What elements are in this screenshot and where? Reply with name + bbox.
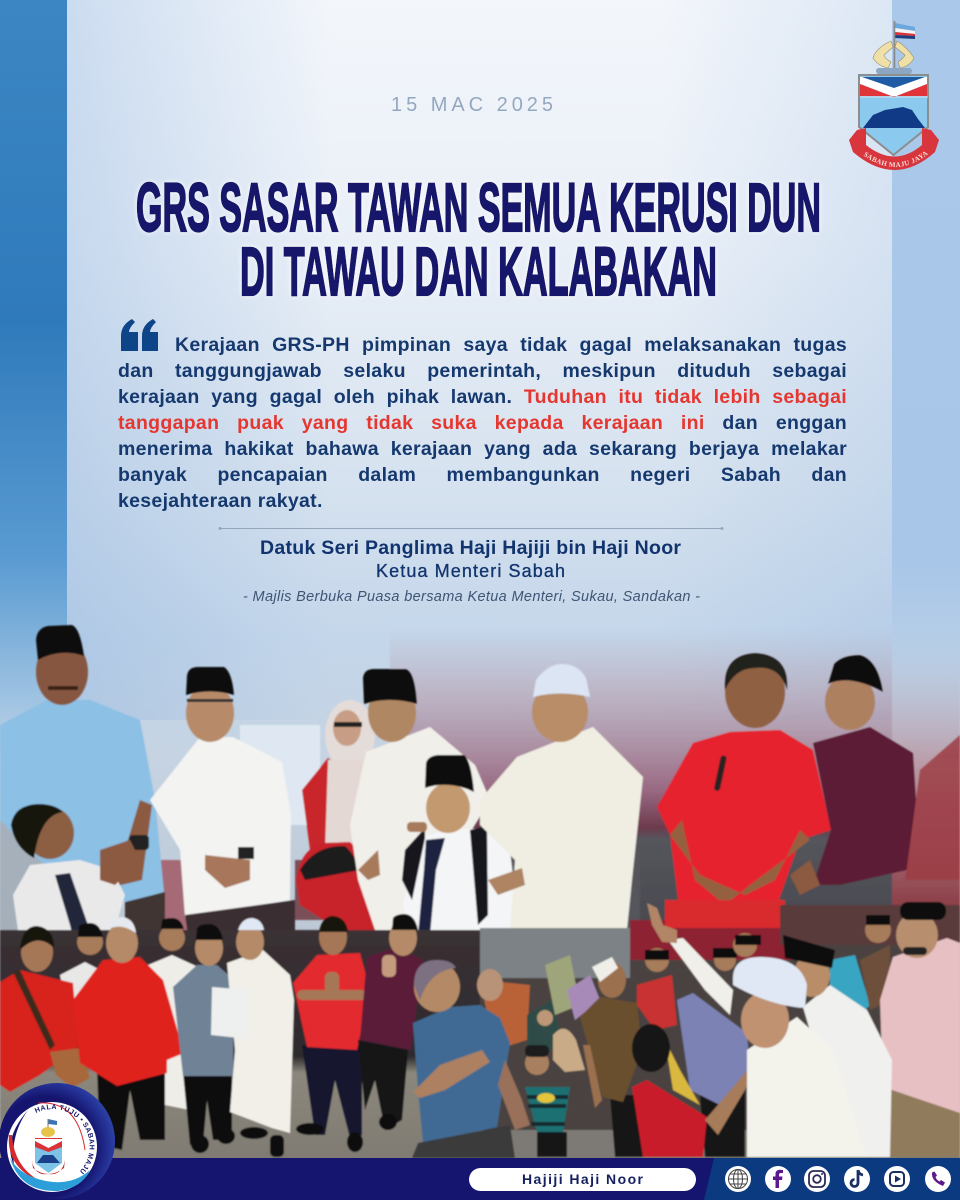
date: 15 MAC 2025 — [391, 94, 553, 116]
quote text block: Kerajaan GRS-PH pimpinan saya tidak gagal melaksanakan tugas — [175, 334, 847, 356]
circular badge: Hala Tuju — [0, 1083, 115, 1199]
person: white robe with cap — [227, 918, 294, 1133]
event caption: - Majlis Berbuka Puasa bersama Ketua Menteri, Sukau, Sandakan - — [243, 589, 700, 605]
name pill: Hajiji Haji Noor — [522, 1171, 644, 1187]
person: white robe with black cap — [783, 935, 892, 1157]
bottom bar — [0, 1158, 960, 1200]
person: red satin baju — [73, 917, 184, 1150]
person: waving man in white cap — [647, 903, 867, 1157]
quote text block: dan tanggungjawab selaku pemerintah, meskipun dituduh sebagai — [118, 360, 847, 382]
flag — [894, 21, 915, 69]
quote text block: kerajaan yang gagal oleh pihak lawan. Tuduhan itu tidak lebih sebagai — [118, 386, 847, 408]
title — [136, 169, 821, 310]
quote text block — [118, 334, 847, 512]
shield — [859, 75, 928, 155]
person: grey-blue shirt with document — [173, 924, 234, 1145]
icon: tiktok — [844, 1166, 870, 1192]
icon: phone — [925, 1166, 951, 1192]
person: red shirt clapping — [293, 916, 370, 1138]
person: pink baju — [880, 902, 960, 1157]
background guests — [60, 918, 196, 1110]
motto ribbon — [849, 128, 939, 170]
right blue band — [892, 0, 960, 760]
motto ribbon: SABAH MAJU JAYA — [864, 152, 928, 168]
person: blue denim shirt with phone — [412, 960, 530, 1158]
divider — [218, 527, 724, 530]
quote text block: menerima hakikat bahawa kerajaan yang ada sekarang berjaya melakar — [118, 438, 847, 460]
red backpack — [296, 842, 378, 940]
person: man in maroon shirt — [790, 655, 916, 895]
person: man in red shirt — [657, 653, 831, 925]
person: maroon shirt with praying hands — [358, 914, 423, 1130]
boy in red shirt — [632, 1024, 748, 1157]
icon: instagram — [804, 1166, 830, 1192]
icon: youtube play — [884, 1166, 910, 1192]
icon: website globe — [725, 1166, 751, 1192]
left blue band — [0, 0, 67, 760]
name pill — [469, 1168, 696, 1191]
arms holding flag — [873, 41, 914, 68]
quote text block: tanggapan puak yang tidak suka kepada kerajaan ini dan enggan — [118, 412, 847, 434]
small crest — [32, 1119, 65, 1174]
person: red baju with strap — [0, 926, 90, 1092]
crowd background right — [477, 915, 891, 1072]
attribution role: Ketua Menteri Sabah — [376, 561, 565, 581]
photo collage — [0, 625, 960, 1160]
wreath — [876, 68, 912, 74]
document held up — [211, 987, 249, 1039]
lower right photo backdrop — [480, 900, 960, 1160]
panel side shading — [67, 0, 892, 720]
person: chief minister in cream robe — [480, 664, 643, 930]
person: boy with black cap and school uniform — [402, 755, 518, 935]
person: brown baju — [580, 957, 645, 1157]
icon: quotation mark — [121, 319, 158, 351]
shoes row — [191, 1114, 397, 1157]
boy in Batman shirt — [525, 1045, 570, 1157]
quote text block: banyak pencapaian dalam membangunkan negeri Sabah dan — [118, 464, 847, 486]
person: boy looking up — [11, 804, 140, 945]
person: man in white robe leaning — [350, 669, 490, 930]
person: woman in hijab — [302, 700, 375, 850]
lower left photo backdrop — [0, 930, 480, 1160]
maroon figure at right edge — [905, 735, 960, 880]
attribution name: Datuk Seri Panglima Haji Hajiji bin Haji Noor — [260, 537, 681, 559]
upper photo backdrop — [0, 630, 960, 940]
icon: facebook — [765, 1166, 791, 1192]
quote text block: kesejahteraan rakyat. — [118, 490, 323, 512]
person: blue-grey shirt — [665, 993, 750, 1157]
person: man in blue shirt — [0, 625, 165, 950]
crest: Sabah coat of arms — [849, 21, 939, 170]
person: man in white shirt with glasses — [150, 667, 295, 950]
